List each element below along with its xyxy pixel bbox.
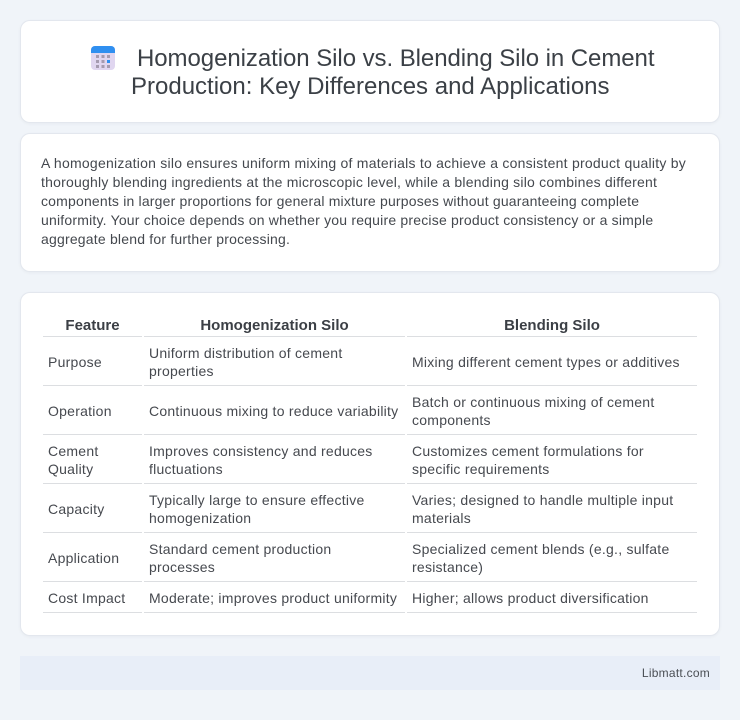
row: capacity: Typically large to ensure effective <box>149 492 364 508</box>
row: operation <box>48 394 654 428</box>
row: application: resistance) <box>412 559 483 575</box>
title: Production: Key Differences and Applications <box>131 73 610 100</box>
icon: calendar <box>91 46 115 70</box>
text block: summary: components in larger proportions for general mixture purposes without guaranteeing complete <box>41 193 639 209</box>
row: operation: Continuous mixing to reduce variability <box>149 403 398 419</box>
row: purpose: Mixing different cement types or additives <box>412 354 680 370</box>
panel: summary card <box>20 133 720 272</box>
footer text: Libmatt.com <box>642 666 710 680</box>
title: Homogenization Silo vs. Blending Silo in Cement <box>137 45 654 72</box>
row: operation: components <box>412 412 491 428</box>
row: application: Standard cement production <box>149 541 331 557</box>
row: application: Specialized cement blends (e.g., sulfate <box>412 541 669 557</box>
row: purpose <box>48 345 680 379</box>
row: cement quality: fluctuations <box>149 461 223 477</box>
row: cement quality: Customizes cement formulations for <box>412 443 644 459</box>
row: purpose: Uniform distribution of cement <box>149 345 342 361</box>
table header: feature: Feature <box>65 317 120 334</box>
row: cement quality: Quality <box>48 461 93 477</box>
row: purpose: Purpose <box>48 354 102 370</box>
row: application: processes <box>149 559 215 575</box>
row: application: Application <box>48 550 119 566</box>
row: capacity <box>48 492 674 526</box>
footer bar <box>20 656 720 690</box>
title <box>131 45 654 100</box>
row: cement quality: Improves consistency and reduces <box>149 443 373 459</box>
row: capacity: Varies; designed to handle multiple input <box>412 492 673 508</box>
row: capacity: Capacity <box>48 501 104 517</box>
panel: title card <box>20 20 720 123</box>
row: cement quality: specific requirements <box>412 461 550 477</box>
row: cost impact: Higher; allows product diversification <box>412 590 649 606</box>
row: application <box>48 541 669 575</box>
row: cement quality: Cement <box>48 443 99 459</box>
text block: summary: aggregate blend for further processing. <box>41 231 290 247</box>
row: operation: Operation <box>48 403 112 419</box>
text block: summary: thoroughly blending ingredients at the microscopic level, while a blending silo combines different <box>41 174 657 190</box>
text block: summary: uniformity. Your choice depends on whether you require precise product consistency or a simple <box>41 212 653 228</box>
panel: comparison table card <box>20 292 720 636</box>
row: cost impact: Cost Impact <box>48 590 125 606</box>
table header: homogenization silo: Homogenization Silo <box>200 317 349 334</box>
table header: blending silo: Blending Silo <box>504 317 600 334</box>
text block: summary: A homogenization silo ensures uniform mixing of materials to achieve a consistent product quality by <box>41 155 686 171</box>
row: cost impact: Moderate; improves product uniformity <box>149 590 397 606</box>
row: cost impact <box>48 590 649 606</box>
row: capacity: materials <box>412 510 471 526</box>
row: cement quality <box>48 443 644 477</box>
row: capacity: homogenization <box>149 510 251 526</box>
row: purpose: properties <box>149 363 214 379</box>
text block: summary <box>41 155 686 247</box>
row: operation: Batch or continuous mixing of cement <box>412 394 654 410</box>
